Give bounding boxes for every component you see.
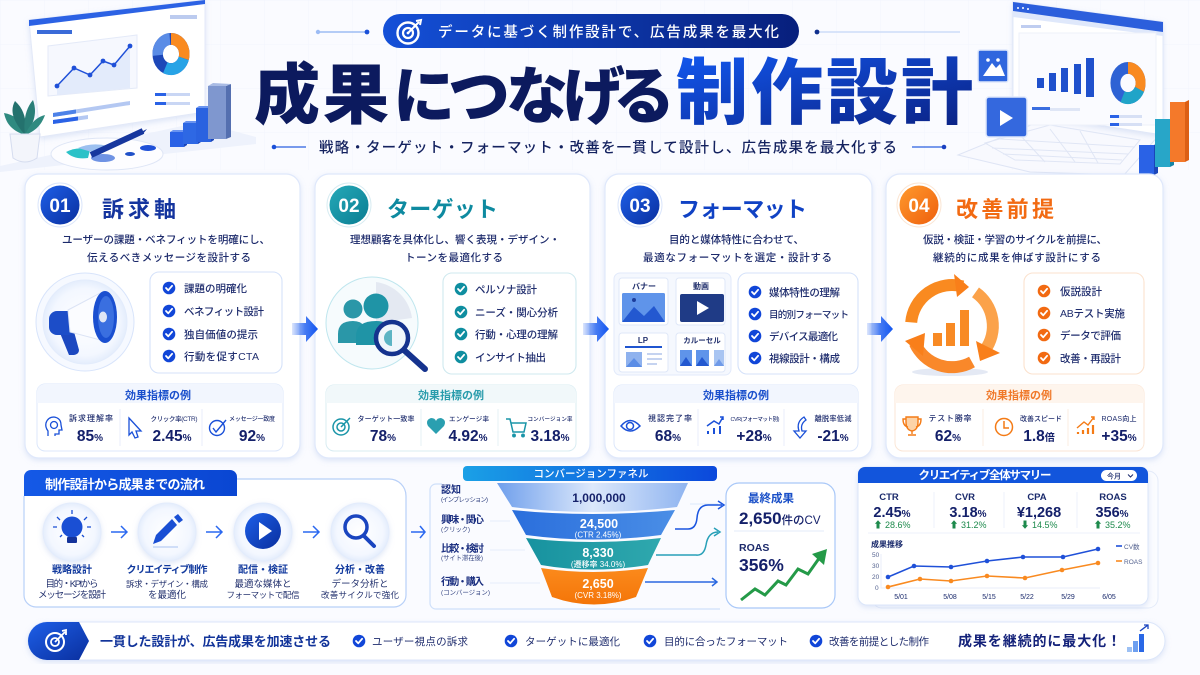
checklist: 独自価値の提示	[184, 328, 258, 341]
metrics panel: 効果指標の例	[703, 388, 769, 402]
metrics panel: 訴求理解率	[69, 413, 113, 423]
description	[923, 233, 1107, 264]
icon: improvement cycle	[905, 274, 1000, 376]
KPI ROAS: ⬆ 35.2%	[1093, 520, 1131, 530]
funnel labels: 興味・関心	[441, 513, 484, 526]
panel: production flow	[24, 470, 406, 607]
banner point 1: ユーザー視点の訴求	[372, 635, 468, 648]
KPI CTR: ⬆ 28.6%	[873, 520, 911, 530]
line chart: 5/22	[1020, 594, 1034, 601]
illustration: laptop with charts and media tiles	[958, 2, 1189, 175]
step: analysis: データ分析と	[331, 578, 389, 590]
checklist: ニーズ・関心分析	[475, 306, 558, 319]
funnel stage: action: (CVR 3.18%)	[574, 591, 622, 600]
step: delivery: 最適な媒体と	[234, 578, 292, 590]
top pill heading: データに基づく制作設計で、広告成果を最大化	[438, 23, 780, 41]
banner message: 一貫した設計が、広告成果を加速させる	[100, 634, 331, 649]
number badge 01: 01	[49, 196, 71, 217]
funnel labels: 認知	[441, 483, 461, 496]
arrow	[303, 526, 319, 538]
metrics panel: CVR(フォーマット別)	[730, 415, 780, 423]
metrics panel: 離脱率低減	[814, 414, 852, 423]
line chart: 5/29	[1061, 594, 1075, 601]
metrics panel: コンバージョン率	[528, 415, 573, 423]
icon: people and magnifier	[326, 277, 425, 369]
icon: cursor	[129, 418, 141, 438]
main title	[254, 54, 973, 134]
checklist: 視線設計・構成	[769, 352, 840, 365]
banner point 4: 改善を前提とした制作	[829, 635, 930, 648]
illustration: dashboard monitor, plant, palette and bars	[0, 0, 256, 172]
funnel heading	[463, 466, 717, 481]
heading: 訴求軸	[102, 197, 176, 222]
funnel labels: (サイト滞在後)	[441, 553, 483, 562]
3d bars	[170, 83, 231, 147]
icon: check circle	[210, 420, 226, 436]
funnel stage: comparison: (遷移率 34.0%)	[571, 559, 625, 569]
heading: フォーマット	[678, 197, 807, 222]
funnel stage: awareness	[497, 483, 688, 512]
metrics panel: 効果指標の例	[418, 388, 484, 402]
metrics panel: 2.45%	[152, 428, 192, 445]
funnel stage: awareness: 1,000,000	[572, 491, 626, 505]
checklist	[443, 273, 576, 374]
format tiles	[614, 273, 731, 375]
icon: heart	[427, 418, 445, 434]
metrics panel: メッセージ一致度	[229, 415, 275, 423]
funnel labels	[441, 483, 490, 596]
metrics panel: テスト勝率	[928, 413, 972, 423]
funnel labels: 行動・購入	[441, 575, 484, 588]
number badge 01	[38, 183, 82, 227]
flow heading tab: 制作設計から成果までの流れ	[45, 477, 205, 492]
step: analysis: 改善サイクルで強化	[321, 590, 399, 600]
bottom banner	[28, 622, 1165, 660]
icon: growth	[707, 417, 723, 434]
number badge 04: 04	[908, 196, 930, 217]
number badge 02	[327, 183, 371, 227]
funnel heading: コンバージョンファネル	[534, 468, 649, 480]
connectors	[490, 501, 724, 586]
banner point 3: 目的に合ったフォーマット	[664, 635, 788, 648]
KPI CPA: CPA	[1027, 492, 1047, 503]
metrics panel: 視認完了率	[648, 413, 692, 423]
metrics panel: 1.8倍	[1023, 428, 1055, 445]
funnel labels: (コンバージョン)	[441, 588, 490, 596]
plant	[4, 100, 45, 162]
icon: head	[46, 417, 62, 436]
summary heading: 今月	[1107, 472, 1121, 480]
step: analysis	[321, 503, 399, 600]
main title: につなげる	[393, 63, 675, 132]
panel: final results: 356%	[739, 555, 784, 575]
number badge 03: 03	[629, 196, 651, 217]
banner conclusion: 成果を継続的に最大化！	[958, 633, 1121, 649]
tile: video: 動画	[693, 281, 709, 291]
checklist: 目的別フォーマット	[769, 309, 849, 321]
summary heading	[858, 467, 1148, 483]
arrow	[206, 526, 222, 538]
KPI CVR: ⬆ 31.2%	[949, 520, 987, 530]
checklist	[150, 272, 282, 373]
line chart: 6/05	[1102, 594, 1116, 601]
arrow: flow to funnel	[411, 526, 425, 538]
metrics panel	[326, 385, 576, 451]
step: delivery	[226, 503, 300, 600]
checklist: 媒体特性の理解	[769, 286, 840, 299]
checklist: ペルソナ設計	[475, 283, 538, 296]
step: delivery: 配信・検証	[238, 563, 288, 576]
panel: 04 改善前提	[886, 174, 1163, 458]
checklist: インサイト抽出	[475, 351, 546, 364]
3d bars	[1139, 100, 1189, 175]
number badge 02: 02	[338, 196, 360, 217]
tile: LP: LP	[638, 336, 649, 345]
icon: megaphone	[36, 273, 134, 371]
metrics panel	[895, 385, 1144, 451]
checklist: ABテスト実施	[1060, 307, 1126, 320]
checklist: ベネフィット設計	[184, 305, 264, 318]
funnel stage: comparison	[526, 538, 661, 570]
panel: final results: 2,650件のCV	[739, 509, 821, 528]
line chart: 30	[872, 563, 880, 570]
arrow 3	[867, 316, 893, 342]
icon: clock	[996, 418, 1012, 436]
metrics panel: エンゲージ率	[449, 414, 490, 423]
tile: banner: バナー	[632, 282, 656, 291]
metrics panel: 効果指標の例	[986, 388, 1052, 402]
step: creative: を最適化	[148, 589, 186, 601]
banner point 2: ターゲットに最適化	[525, 635, 620, 648]
line chart: CV数	[1124, 542, 1140, 551]
summary heading: クリエイティブ全体サマリー	[918, 468, 1052, 482]
step: strategy: 目的・KPIから	[46, 578, 98, 590]
arrow 1	[292, 316, 318, 342]
chart: conversion funnel	[430, 466, 724, 609]
metrics panel: +28%	[736, 428, 772, 445]
summary dividers	[868, 492, 1140, 533]
metrics panel: 85%	[77, 428, 103, 445]
description: トーンを最適化する	[405, 251, 503, 264]
funnel stage: action	[541, 568, 648, 604]
funnel labels: (クリック)	[441, 526, 470, 534]
checklist: データで評価	[1060, 329, 1121, 342]
number badge 03	[618, 183, 662, 227]
line chart: 20	[872, 574, 880, 581]
KPI CVR: 3.18%	[949, 505, 987, 521]
step: delivery: フォーマットで配信	[226, 590, 300, 600]
description	[62, 233, 270, 264]
checklist: 行動・心理の理解	[475, 328, 558, 341]
line chart: 成果推移	[871, 539, 903, 549]
funnel labels: (インプレッション)	[441, 496, 488, 504]
number badge 04	[897, 183, 941, 227]
description	[643, 233, 832, 264]
funnel labels: 比較・検討	[441, 542, 484, 555]
description: 目的と媒体特性に合わせて、	[669, 233, 804, 246]
KPI ROAS: 356%	[1095, 505, 1129, 521]
panel: 01 訴求軸	[25, 174, 300, 458]
checklist	[1024, 273, 1144, 374]
icon: cart	[506, 419, 526, 437]
checklist	[738, 273, 858, 374]
icon: trophy	[903, 417, 921, 435]
palette and pen	[51, 129, 163, 170]
checklist: デバイス最適化	[769, 330, 838, 343]
icon: image tile	[978, 50, 1008, 82]
panel: final results: ROAS	[739, 542, 769, 554]
icon: video tile	[986, 97, 1027, 137]
growth arrow	[741, 549, 827, 600]
metrics panel: 62%	[935, 428, 961, 445]
step: creative: 訴求・デザイン・構成	[126, 579, 208, 589]
funnel stage: interest: 24,500	[580, 517, 618, 531]
metrics panel: 効果指標の例	[125, 388, 191, 402]
metrics panel: 92%	[239, 428, 265, 445]
funnel stage: comparison: 8,330	[582, 546, 614, 560]
KPI ROAS: ROAS	[1099, 492, 1127, 503]
KPI CPA	[1017, 492, 1061, 530]
tile: carousel: カルーセル	[683, 336, 721, 345]
main title: 制作設計	[676, 54, 973, 134]
line chart: 50	[872, 552, 880, 559]
line chart: 5/01	[894, 594, 908, 601]
icon: rising bars	[1127, 625, 1148, 652]
metrics panel: ターゲット一致率	[358, 414, 414, 423]
flow heading tab	[24, 470, 237, 496]
heading: 改善前提	[956, 197, 1054, 222]
line chart: ROAS	[1124, 559, 1143, 566]
description	[350, 233, 560, 264]
checklist: 仮説設計	[1060, 285, 1102, 298]
icon: eye	[621, 420, 640, 431]
KPI CPA: ¥1,268	[1017, 505, 1061, 521]
icon: down arrow	[794, 417, 806, 438]
main title: 成果	[254, 58, 389, 132]
KPI CVR	[949, 492, 987, 530]
description: ユーザーの課題・ベネフィットを明確にし、	[62, 233, 270, 246]
heading: ターゲット	[387, 197, 498, 222]
KPI CTR: CTR	[879, 492, 899, 503]
description: 仮説・検証・学習のサイクルを前提に、	[923, 233, 1107, 246]
metrics panel: 4.92%	[448, 428, 488, 445]
line chart	[871, 539, 1143, 601]
top pill heading	[316, 14, 960, 48]
step: strategy: メッセージを設計	[38, 589, 106, 601]
KPI ROAS	[1093, 492, 1131, 530]
checklist: 改善・再設計	[1060, 352, 1122, 365]
metrics panel: クリック率(CTR)	[150, 415, 198, 423]
metrics panel: 78%	[370, 428, 396, 445]
metrics panel: 68%	[655, 428, 681, 445]
step: strategy: 戦略設計	[52, 563, 92, 576]
metrics panel: 3.18%	[530, 428, 570, 445]
KPI CTR	[873, 492, 911, 530]
checklist: 行動を促すCTA	[184, 350, 259, 363]
description: 最適なフォーマットを選定・設計する	[643, 251, 832, 264]
metrics panel: 改善スピード	[1020, 414, 1062, 423]
checklist: 課題の明確化	[184, 282, 248, 295]
description: 理想顧客を具体化し、響く表現・デザイン・	[350, 233, 560, 246]
step: analysis: 分析・改善	[335, 563, 385, 576]
metrics panel: ROAS向上	[1102, 414, 1136, 423]
subtitle: 戦略・ターゲット・フォーマット・改善を一貫して設計し、広告成果を最大化する	[319, 140, 897, 156]
arrow 2	[583, 316, 609, 342]
step: creative: クリエイティブ制作	[126, 563, 208, 576]
metrics panel	[614, 385, 858, 451]
metrics panel: +35%	[1101, 428, 1137, 445]
metrics panel: -21%	[817, 428, 849, 445]
line chart: 5/08	[943, 594, 957, 601]
panel: 02 ターゲット	[315, 174, 590, 458]
step: creative	[126, 503, 208, 601]
funnel stage: action: 2,650	[582, 577, 614, 591]
KPI CVR: CVR	[955, 492, 975, 503]
panel: creative summary	[858, 467, 1158, 608]
description: 伝えるべきメッセージを設計する	[87, 251, 251, 264]
panel: final results: 最終成果	[748, 491, 794, 505]
description: 継続的に成果を伸ばす設計にする	[933, 251, 1101, 264]
icon: rising bars	[1077, 417, 1094, 434]
KPI CPA: ⬇ 14.5%	[1020, 520, 1058, 530]
funnel stage: interest	[512, 510, 675, 540]
panel: 03 フォーマット	[605, 174, 872, 458]
arrow	[111, 526, 127, 538]
icon: target	[333, 418, 350, 435]
icon: target	[398, 20, 421, 44]
banner target badge	[28, 622, 89, 660]
KPI CTR: 2.45%	[873, 505, 911, 521]
line chart: 0	[875, 585, 879, 592]
line chart: 5/15	[982, 594, 996, 601]
funnel stage: interest: (CTR 2.45%)	[575, 530, 622, 540]
step: strategy	[38, 503, 106, 601]
panel: final results	[726, 483, 835, 608]
metrics panel	[37, 384, 283, 451]
